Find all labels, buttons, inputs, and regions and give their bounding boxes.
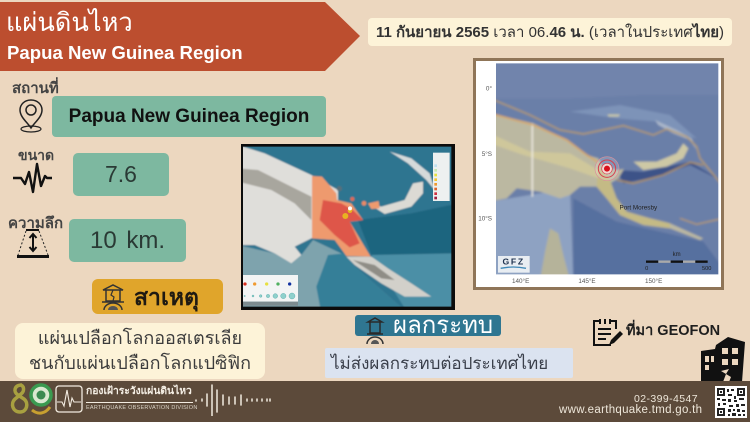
impact description box <box>325 348 573 378</box>
label: magnitude: ขนาด <box>18 147 54 163</box>
cause heading <box>92 279 223 314</box>
label: location: สถานที่ <box>12 80 59 97</box>
GFZ epicentre map: Port Moresby <box>620 205 658 212</box>
divider under division name <box>86 402 193 403</box>
impact heading <box>355 315 501 336</box>
icon: cracked house <box>102 284 124 310</box>
date and time box: 11 กันยายน 2565 เวลา 06.46 น. (เวลาในประเทศไทย) <box>376 24 724 41</box>
cause description box: ชนกับแผ่นเปลือกโลกแปซิฟิก <box>29 353 251 373</box>
GFZ epicentre map: 145°E <box>578 277 596 285</box>
location value box: Papua New Guinea Region <box>69 106 309 126</box>
icon: clipboard and pen <box>593 319 623 346</box>
date and time box <box>368 18 732 46</box>
icon: depth <box>17 229 49 258</box>
subtitle: region: Papua New Guinea Region <box>7 42 243 63</box>
source label: ที่มา GEOFON <box>626 323 720 339</box>
division name thai: กองเฝ้าระวังแผ่นดินไหว <box>86 386 192 397</box>
GFZ epicentre map: GFZ <box>503 256 525 266</box>
shakemap: intensity map <box>241 144 455 310</box>
label: depth: ความลึก <box>8 215 63 232</box>
icon: seismic wave <box>13 162 52 194</box>
depth value box: 10 km. <box>90 226 165 254</box>
cause heading text: สาเหตุ <box>134 284 199 310</box>
title: earthquake: แผ่นดินไหว <box>6 9 133 37</box>
impact description box: ไม่ส่งผลกระทบต่อประเทศไทย <box>331 354 548 372</box>
contact website: www.earthquake.tmd.go.th <box>559 404 702 416</box>
icon: cracked house small <box>365 317 385 344</box>
icon: collapsed building <box>701 337 745 381</box>
sound wave graphic <box>195 384 271 416</box>
GFZ epicentre map: 150°E <box>645 277 662 285</box>
footer bar <box>0 381 750 422</box>
qr code <box>715 386 747 418</box>
GFZ epicentre map: 500 <box>702 266 711 272</box>
cause description box: แผ่นเปลือกโลกออสเตรเลีย <box>38 328 242 348</box>
magnitude value box <box>73 153 169 196</box>
GFZ epicentre map: km <box>673 252 681 258</box>
GFZ epicentre map <box>473 58 724 290</box>
GFZ epicentre map: 10°S <box>478 215 492 223</box>
logo: 80 years emblem <box>10 383 53 415</box>
GFZ epicentre map: 140°E <box>512 277 529 285</box>
GFZ epicentre map: 0° <box>486 85 492 93</box>
title banner <box>0 2 360 71</box>
cause description box <box>15 323 265 379</box>
GFZ epicentre map: 0 <box>645 266 648 272</box>
magnitude value box: 7.6 <box>105 161 137 187</box>
division name english: EARTHQUAKE OBSERVATION DIVISION <box>86 405 198 411</box>
icon: location pin <box>19 99 43 133</box>
impact heading text: ผลกระทบ <box>393 312 493 339</box>
location value box <box>52 96 326 137</box>
contact phone: 02-399-4547 <box>634 393 698 405</box>
GFZ epicentre map: 5°S <box>482 150 492 158</box>
logo: seismograph box <box>55 385 83 413</box>
depth value box <box>69 219 186 262</box>
